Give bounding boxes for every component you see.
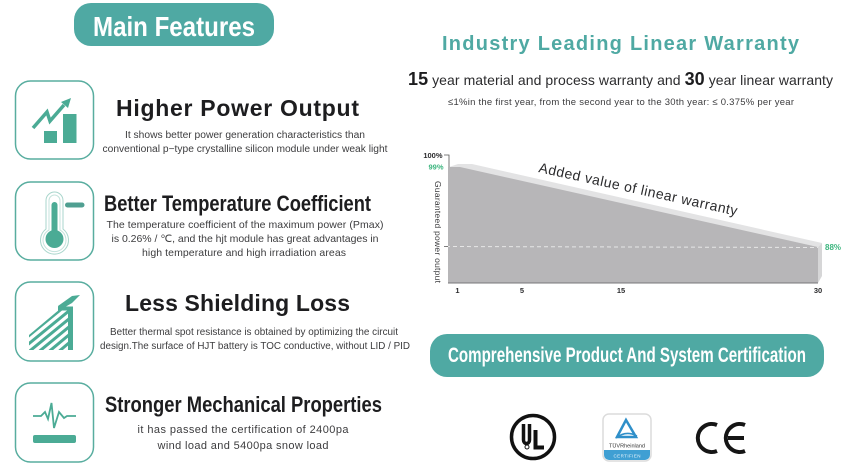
description: it has passed the certification of 2400pa [138,424,349,436]
heading: Higher Power Output [116,95,359,121]
icon: TUV Rheinland mark: TÜVRheinland [609,442,645,450]
x axis labels: 15 [617,286,625,295]
panel: better temperature coefficient [16,182,384,260]
main features heading [74,3,274,46]
guaranteed area [448,167,818,283]
warranty title: Industry Leading Linear Warranty [442,33,800,55]
main features heading: Main Features [93,11,255,42]
warranty subtitle: 15 year material and process warranty and 30 year linear warranty [408,69,833,89]
y axis labels: 99% [428,162,444,172]
x axis labels: 5 [520,286,524,295]
warranty chart [423,151,841,295]
x axis labels: 30 [814,286,822,295]
right side edge [818,243,822,283]
description [100,327,410,352]
panel: less shielding loss [16,282,410,361]
description: design.The surface of HJT battery is TOC conductive, without LID / PID [100,341,410,352]
description: is 0.26% / ℃, and the hjt module has great advantages in [112,233,379,245]
icon: thermometer [16,182,94,260]
description: Better thermal spot resistance is obtained by optimizing the circuit [110,327,398,338]
description: wind load and 5400pa snow load [156,440,328,452]
description [106,219,384,259]
icon: shielded cell [16,282,94,361]
x axis labels: 1 [455,286,460,295]
description [138,424,349,452]
panel: higher power output [16,81,388,159]
axes [444,155,449,246]
x axis labels [455,286,822,295]
description: high temperature and high irradiation areas [142,247,346,259]
icon: TUV Rheinland mark [603,414,651,461]
heading: Better Temperature Coefficient [104,191,372,216]
description [102,130,388,155]
panel: stronger mechanical properties [16,383,382,462]
y axis title: Guaranteed power output [433,181,443,284]
icon: rising chart [16,81,94,159]
y axis labels [423,151,444,172]
description: The temperature coefficient of the maximum power (Pmax) [106,219,384,231]
icon: vibration pulse [16,383,94,462]
heading: Less Shielding Loss [125,290,350,316]
88% dashed line [446,246,818,248]
icon: TUV Rheinland mark: CERTIFIEN [614,454,640,458]
warranty note: ≤1%in the first year, from the second year to the 30th year: ≤ 0.375% per year [448,97,794,108]
y axis labels: 100% [423,151,443,160]
band label: Added value of linear warranty [537,159,739,219]
description: It shows better power generation characteristics than [125,130,365,141]
description: conventional p−type crystalline silicon module under weak light [102,144,388,155]
added value band [449,164,822,247]
icon: UL mark [512,416,554,458]
icon: CE mark [698,424,745,452]
heading: Stronger Mechanical Properties [105,392,382,417]
88% label: 88% [825,243,841,252]
certification heading [430,334,824,377]
